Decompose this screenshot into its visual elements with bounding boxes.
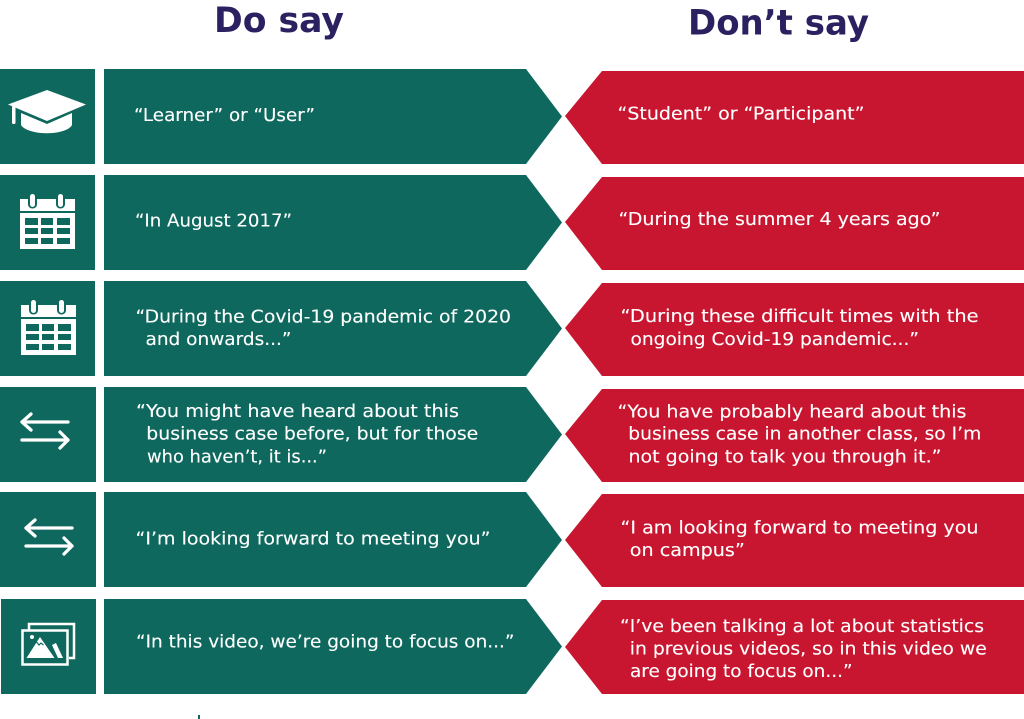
don't say panel: on campus: on campus” <box>630 540 745 561</box>
row 5: meeting <box>0 492 1024 587</box>
do say panel: might have heard: “You might have heard about this <box>136 401 459 422</box>
do say panel: focus: “In this video, we’re going to focus on...” <box>136 632 514 653</box>
don't say panel: probably heard: “You have probably heard about this <box>618 402 966 423</box>
icon: graduation cap <box>0 69 95 164</box>
do say panel: August 2017: “In August 2017” <box>135 211 292 232</box>
do say panel: might have heard <box>104 387 562 482</box>
don't say panel: on campus: “I am looking forward to meeting you <box>620 518 978 539</box>
row 4: business case <box>0 387 1024 482</box>
do say panel: looking forward <box>104 492 562 587</box>
don't say panel: probably heard <box>565 389 1024 482</box>
heading: Don't say: Don’t say <box>688 4 869 44</box>
row 1: learner <box>0 69 1024 164</box>
do say panel: learner: “Learner” or “User” <box>134 105 315 126</box>
don't say panel: probably heard: business case in another class, so I’m <box>628 424 981 445</box>
don't say panel: summer: “During the summer 4 years ago” <box>618 209 940 230</box>
do say panel: Covid-19 pandemic: and onwards...” <box>146 329 292 350</box>
do say panel: learner <box>104 69 562 164</box>
row 3: pandemic <box>0 281 1024 376</box>
do say panel: might have heard: who haven’t, it is...” <box>147 446 327 467</box>
don't say panel: statistics <box>565 600 1024 694</box>
don't say panel: statistics: in previous videos, so in this video we <box>630 638 987 659</box>
do say panel: Covid-19 pandemic <box>104 281 562 376</box>
row 6: video <box>1 599 1024 694</box>
don't say panel: student <box>565 71 1024 164</box>
don't say panel: summer <box>565 177 1024 270</box>
icon: opposing arrows <box>0 387 96 482</box>
icon: calendar <box>0 175 95 270</box>
don't say panel: difficult times: ongoing Covid-19 pandemic...” <box>630 329 919 350</box>
don't say panel: statistics: “I’ve been talking a lot about statistics <box>620 616 984 637</box>
row 2: date <box>0 175 1024 270</box>
icon: calendar <box>0 281 95 376</box>
don't say panel: difficult times: “During these difficult times with the <box>620 306 978 327</box>
do say panel: looking forward: “I’m looking forward to meeting you” <box>136 528 490 549</box>
icon: opposing arrows <box>0 492 96 587</box>
don't say panel: student: “Student” or “Participant” <box>618 103 864 124</box>
do say panel: might have heard: business case before, but for those <box>146 423 478 444</box>
icon: image stack <box>1 599 96 694</box>
don't say panel: statistics: are going to focus on...” <box>630 661 852 682</box>
don't say panel: difficult times <box>565 283 1024 376</box>
do say panel: August 2017 <box>104 175 562 270</box>
don't say panel: on campus <box>565 494 1024 587</box>
do say panel: Covid-19 pandemic: “During the Covid-19 pandemic of 2020 <box>136 307 511 328</box>
heading: Do say: Do say <box>214 1 344 41</box>
don't say panel: probably heard: not going to talk you through it.” <box>628 447 942 468</box>
do say panel: focus <box>104 599 562 694</box>
